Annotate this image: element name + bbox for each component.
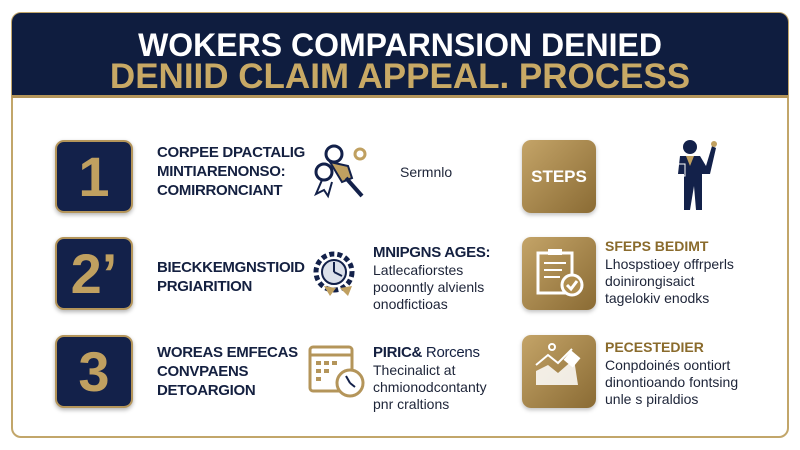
- title line 1: WOKERS COMPARNSION DENIED: [138, 27, 662, 63]
- number 2: 2’: [71, 242, 117, 305]
- number 3: 3: [78, 340, 110, 403]
- icon: gear: [314, 252, 354, 296]
- gold box: STEPS: [522, 140, 596, 213]
- text block gold 3: [605, 339, 738, 407]
- text block gold 3: dinontioando fontsing: [605, 374, 738, 390]
- text step 3: [157, 344, 298, 399]
- gold box: chart: [522, 335, 596, 408]
- header: [12, 13, 788, 98]
- text step 3: WOREAS EMFECAS: [157, 344, 298, 361]
- text block gold 3: Conpdoinés oontiort: [605, 357, 730, 373]
- icon: hand key: [314, 144, 366, 198]
- title line 2: DENIID CLAIM APPEAL. PROCESS: [110, 57, 690, 96]
- text block 3: Thecinalict at: [373, 362, 455, 378]
- text block 3: [373, 344, 487, 412]
- text step 3: DETOARGION: [157, 382, 255, 399]
- icon: person: [678, 140, 717, 210]
- text block gold 2: Lhospstioey offrperls: [605, 256, 734, 272]
- text block gold 2: SFEPS BEDIMT: [605, 238, 708, 254]
- text block 3: PIRIC& Rorcens: [373, 344, 480, 361]
- text step 1: MINTIARENONSO:: [157, 163, 285, 180]
- text block 2: MNIPGNS AGES:: [373, 244, 490, 261]
- gold box: STEPS: STEPS: [531, 167, 587, 186]
- number 2: [55, 237, 133, 310]
- text step 1: COMIRRONCIANT: [157, 182, 282, 199]
- text step 2: BIECKKEMGNSTIOID: [157, 259, 305, 276]
- icon: calendar clock: [308, 346, 364, 398]
- text step 2: PRGIARITION: [157, 278, 252, 295]
- number 1: 1: [78, 145, 110, 208]
- text block gold 3: unle s piraldios: [605, 391, 698, 407]
- text: Sermnlo: Sermnlo: [400, 164, 452, 180]
- text block gold 2: [605, 238, 734, 306]
- number 1: [55, 140, 133, 213]
- text step 3: CONVPAENS: [157, 363, 248, 380]
- text block 3: chmionodcontanty: [373, 379, 487, 395]
- text block 2: pooonntly alvienls: [373, 279, 484, 295]
- text block 3: pnr craltions: [373, 396, 449, 412]
- text block 2: Latlecafiorstes: [373, 262, 463, 278]
- text block gold 2: tagelokiv enodks: [605, 290, 709, 306]
- text step 1: [157, 144, 305, 199]
- gold box: clipboard: [522, 237, 596, 310]
- number 3: [55, 335, 133, 408]
- text step 1: CORPEE DPACTALIG: [157, 144, 305, 161]
- text block gold 2: doinirongisaict: [605, 273, 694, 289]
- text block 2: onodfictioas: [373, 296, 448, 312]
- text block 2: [373, 244, 490, 312]
- text block gold 3: PECESTEDIER: [605, 339, 704, 355]
- text step 2: [157, 259, 305, 295]
